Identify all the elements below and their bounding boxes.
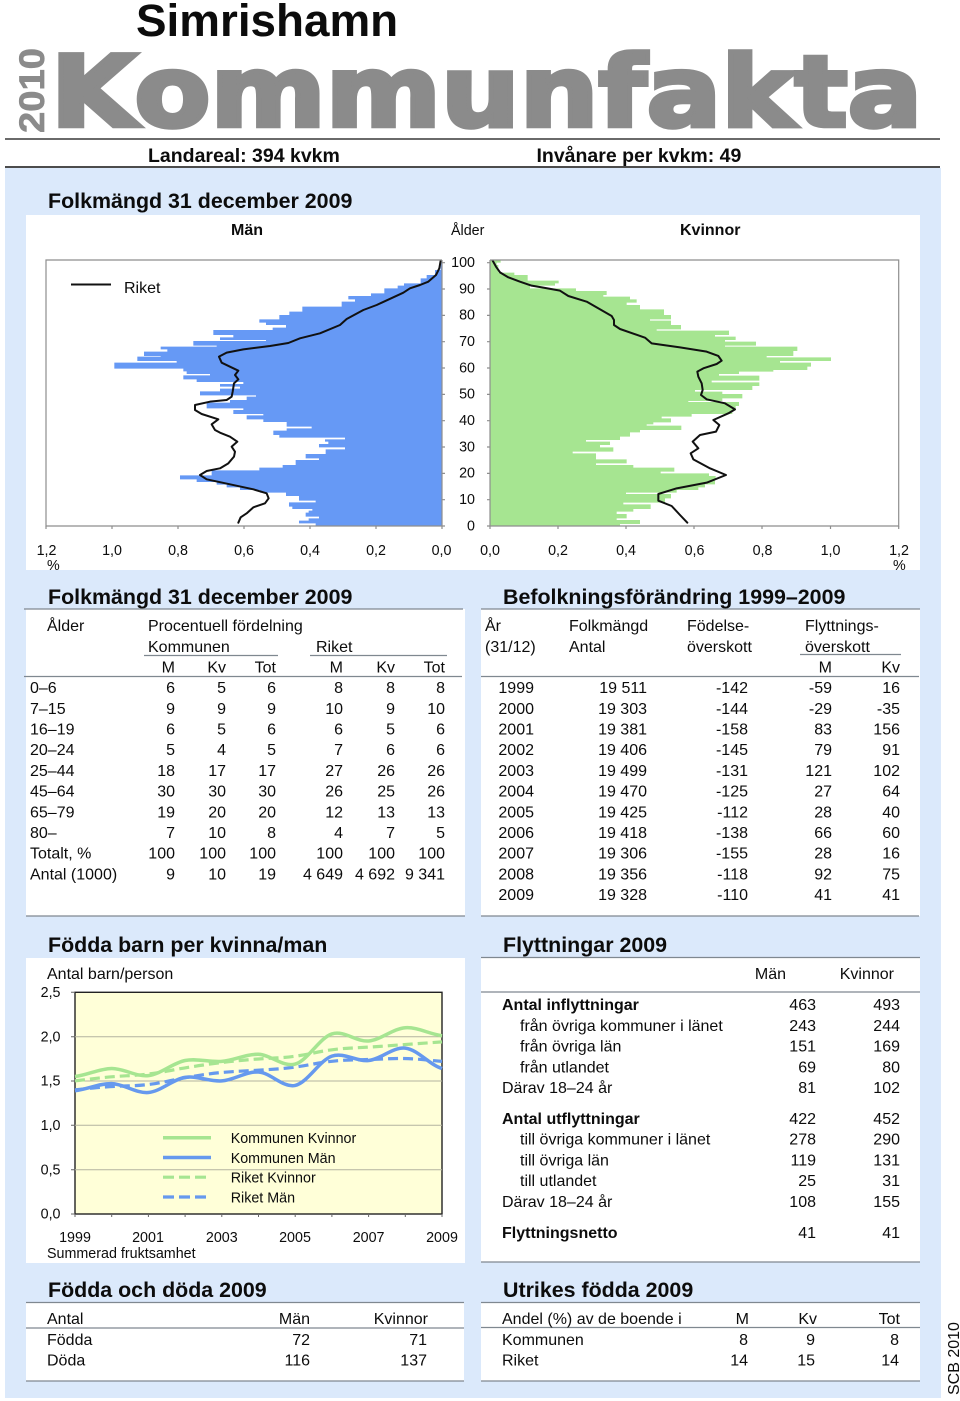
table rows: 6 bbox=[267, 680, 276, 697]
x axis labels: 2001 bbox=[132, 1230, 164, 1246]
table rows: -155 bbox=[716, 846, 748, 863]
table rows: -145 bbox=[716, 742, 748, 759]
table rows: 5 bbox=[217, 722, 226, 738]
inflow rows: 463 bbox=[789, 997, 816, 1014]
label: men: Män bbox=[231, 222, 263, 239]
table rows: 19 bbox=[157, 804, 175, 821]
table rows: 64 bbox=[882, 784, 900, 801]
panel: fertility chart bbox=[26, 958, 465, 1263]
y axis labels: 1,0 bbox=[41, 1118, 61, 1134]
table rows: 10 bbox=[208, 866, 226, 883]
axis labels: percent: 0,4 bbox=[616, 543, 636, 559]
x axis labels: 2003 bbox=[206, 1230, 238, 1246]
table rows: 2004 bbox=[498, 784, 534, 801]
table rows: 6 bbox=[386, 742, 395, 759]
panel: population table bbox=[24, 609, 465, 916]
table rows: 121 bbox=[805, 763, 832, 780]
table rows: 6 bbox=[166, 722, 175, 738]
panel: births and deaths table: 72 bbox=[292, 1332, 310, 1349]
table rows: 2008 bbox=[498, 866, 534, 883]
table rows: 16 bbox=[882, 846, 900, 863]
table rows: 8 bbox=[386, 680, 395, 697]
panel: births and deaths table: Födda bbox=[47, 1332, 92, 1349]
table rows: 9 bbox=[217, 701, 226, 718]
line: national men bbox=[75, 1058, 442, 1090]
key figure: land area: Landareal: 394 kvkm bbox=[148, 145, 340, 167]
table rows: 0–6 bbox=[30, 680, 57, 697]
table rows: 17 bbox=[258, 763, 276, 780]
table rows: 60 bbox=[882, 825, 900, 842]
table rows: 9 341 bbox=[405, 866, 445, 883]
axis labels: percent: 0,2 bbox=[548, 543, 568, 559]
line: national men bbox=[195, 261, 441, 523]
table rows: 10 bbox=[208, 825, 226, 842]
table rows: 9 bbox=[166, 701, 175, 718]
table rows: 7 bbox=[386, 825, 395, 842]
table rows: 19 328 bbox=[598, 887, 647, 904]
panel: foreign born table: 9 bbox=[806, 1332, 815, 1349]
axis labels: percent: 0,2 bbox=[366, 543, 386, 559]
table rows: 19 499 bbox=[598, 763, 647, 780]
table rows: 26 bbox=[325, 784, 343, 801]
panel: births and deaths table: 71 bbox=[409, 1332, 427, 1349]
panel: foreign born table: M bbox=[736, 1311, 749, 1328]
table rows: 17 bbox=[208, 763, 226, 780]
panel: population change table bbox=[481, 609, 920, 916]
table rows: 19 406 bbox=[598, 742, 647, 759]
table rows: 41 bbox=[814, 887, 832, 904]
table rows: 91 bbox=[882, 742, 900, 759]
panel: foreign born table: 15 bbox=[797, 1353, 815, 1370]
inflow rows: 493 bbox=[873, 997, 900, 1014]
table rows: 2006 bbox=[498, 825, 534, 842]
line: national women bbox=[75, 1042, 442, 1081]
line: municipality women bbox=[75, 1028, 442, 1076]
table rows: 19 470 bbox=[598, 784, 647, 801]
outflow rows: 278 bbox=[789, 1132, 816, 1149]
axis labels: percent: 1,2 bbox=[889, 543, 909, 559]
table rows: 66 bbox=[814, 825, 832, 842]
axis labels: age: 20 bbox=[459, 466, 475, 482]
outflow rows: till övriga kommuner i länet bbox=[520, 1132, 711, 1149]
inflow rows: 102 bbox=[873, 1080, 900, 1097]
table header: Födelse- bbox=[687, 618, 749, 635]
outflow rows: Antal utflyttningar bbox=[502, 1111, 640, 1128]
inflow rows: 151 bbox=[789, 1039, 816, 1056]
heading: population pyramid: Folkmängd 31 december 2009 bbox=[48, 189, 352, 213]
axis labels: percent: 1,2 bbox=[37, 543, 56, 559]
table rows: 5 bbox=[386, 722, 395, 738]
legend: national line bbox=[71, 280, 161, 297]
table rows: 20 bbox=[208, 804, 226, 821]
table rows: 16–19 bbox=[30, 722, 75, 738]
inflow rows: från övriga kommuner i länet bbox=[520, 1017, 723, 1035]
table header: (31/12) bbox=[485, 639, 536, 656]
panel: foreign born table: Tot bbox=[879, 1311, 901, 1328]
inflow rows bbox=[502, 997, 900, 1097]
legend: Riket Kvinnor bbox=[231, 1171, 316, 1187]
axis labels: age: 40 bbox=[459, 413, 475, 429]
table rows: 2003 bbox=[498, 763, 534, 780]
panel: population pyramid bbox=[26, 215, 920, 574]
axis labels: percent: % bbox=[893, 558, 906, 574]
axis labels: percent: 1,0 bbox=[102, 543, 122, 559]
outflow rows: 119 bbox=[790, 1152, 816, 1169]
table rows: 100 bbox=[418, 846, 445, 863]
table rows: 18 bbox=[157, 763, 175, 780]
panel: births and deaths table: 116 bbox=[284, 1353, 310, 1370]
panel: births and deaths table: Antal bbox=[47, 1311, 83, 1328]
panel: births and deaths table: Kvinnor bbox=[374, 1311, 429, 1328]
table header: Antal bbox=[569, 639, 605, 656]
axis labels: age: 50 bbox=[459, 387, 475, 403]
table rows: 100 bbox=[368, 846, 395, 863]
table header: Procentuell fördelning bbox=[148, 618, 303, 635]
table rows: 30 bbox=[258, 784, 276, 801]
table rows: 100 bbox=[148, 846, 175, 863]
legend bbox=[163, 1131, 356, 1206]
table rows: -35 bbox=[877, 701, 900, 718]
table header bbox=[47, 616, 446, 676]
axis labels: age: 10 bbox=[459, 492, 475, 508]
panel: foreign born table: Riket bbox=[502, 1353, 539, 1370]
table header: Kommunen bbox=[148, 639, 230, 656]
inflow rows: 81 bbox=[798, 1080, 816, 1097]
table rows: 25–44 bbox=[30, 763, 75, 780]
table rows bbox=[30, 680, 445, 883]
table rows: -125 bbox=[716, 784, 748, 801]
table rows: 5 bbox=[267, 742, 276, 759]
table rows: 20–24 bbox=[30, 742, 75, 759]
x axis labels: 2005 bbox=[279, 1230, 311, 1246]
table header: Män bbox=[755, 966, 786, 983]
table rows: 27 bbox=[325, 763, 343, 780]
axis labels: percent: 0,8 bbox=[168, 543, 188, 559]
table rows bbox=[498, 680, 900, 904]
table rows: -138 bbox=[716, 825, 748, 842]
inflow rows: 244 bbox=[873, 1018, 900, 1035]
axis labels: age: 70 bbox=[459, 334, 475, 350]
x axis labels bbox=[59, 1230, 458, 1246]
legend: Kommunen Män bbox=[231, 1151, 336, 1167]
table header: M bbox=[162, 659, 175, 676]
table rows: 6 bbox=[267, 722, 276, 738]
table rows: 6 bbox=[436, 722, 445, 738]
table header: M bbox=[330, 659, 343, 676]
table rows: Totalt, % bbox=[30, 846, 91, 863]
heading: births and deaths: Födda och döda 2009 bbox=[48, 1278, 267, 1302]
table rows: 12 bbox=[325, 804, 343, 821]
heading: population change: Befolkningsförändring 1999–2009 bbox=[503, 585, 845, 609]
y axis labels: 1,5 bbox=[41, 1074, 61, 1090]
table rows: 30 bbox=[208, 784, 226, 801]
panel: foreign born table bbox=[481, 1302, 920, 1381]
table header: Ålder bbox=[47, 616, 85, 635]
table rows: 25 bbox=[377, 784, 395, 801]
x axis labels: 2009 bbox=[426, 1230, 458, 1246]
axis labels: age: 60 bbox=[459, 360, 475, 376]
inflow rows: 169 bbox=[873, 1039, 900, 1056]
heading: fertility: Födda barn per kvinna/man bbox=[48, 933, 327, 957]
panel: migration table bbox=[481, 957, 920, 1262]
table rows: 26 bbox=[427, 763, 445, 780]
table rows: 4 692 bbox=[355, 866, 395, 883]
legend: national line: Riket bbox=[124, 280, 161, 297]
label: age: Ålder bbox=[451, 222, 485, 239]
table rows: 7 bbox=[166, 825, 175, 842]
table rows: 16 bbox=[882, 680, 900, 697]
panel: foreign born table: Kv bbox=[798, 1311, 817, 1328]
table header: Riket bbox=[316, 639, 353, 656]
outflow rows: till övriga län bbox=[520, 1152, 609, 1169]
table rows: 8 bbox=[436, 680, 445, 697]
table rows: 26 bbox=[377, 763, 395, 780]
table rows: 7–15 bbox=[30, 701, 66, 718]
table rows: -118 bbox=[717, 866, 748, 883]
table rows: 6 bbox=[334, 722, 343, 738]
x axis labels: 2007 bbox=[353, 1230, 385, 1246]
table rows: 79 bbox=[814, 742, 832, 759]
inflow rows: från övriga län bbox=[520, 1038, 621, 1056]
table header: Tot bbox=[424, 659, 446, 676]
table rows: 65–79 bbox=[30, 804, 75, 821]
net migration row: 41 bbox=[798, 1225, 816, 1242]
axis labels: percent: 0,8 bbox=[753, 543, 772, 559]
chart frame and axes bbox=[46, 260, 899, 529]
table rows: 26 bbox=[427, 784, 445, 801]
table rows: -29 bbox=[809, 701, 832, 718]
table header: M bbox=[819, 659, 832, 676]
table rows: -131 bbox=[716, 763, 748, 780]
outflow rows: 25 bbox=[798, 1173, 816, 1190]
plot area bbox=[75, 992, 442, 1214]
axis labels: percent: 0,6 bbox=[685, 543, 704, 559]
inflow rows: 69 bbox=[798, 1059, 816, 1076]
inflow rows: från utlandet bbox=[520, 1058, 610, 1076]
caption: Summerad fruktsamhet bbox=[47, 1246, 196, 1262]
axis labels: percent: 0,0 bbox=[432, 543, 451, 559]
line: national women bbox=[493, 261, 735, 523]
heading: population table: Folkmängd 31 december 2009 bbox=[48, 585, 352, 609]
table rows: 8 bbox=[334, 680, 343, 697]
table rows: 80– bbox=[30, 825, 57, 842]
inflow rows: Därav 18–24 år bbox=[502, 1079, 613, 1097]
heading: foreign born: Utrikes födda 2009 bbox=[503, 1278, 693, 1302]
table rows: 19 306 bbox=[598, 846, 647, 863]
table rows: 28 bbox=[814, 804, 832, 821]
outflow rows: 422 bbox=[789, 1111, 816, 1128]
table rows: 45–64 bbox=[30, 784, 75, 801]
key figure: inhabitants per sq km: Invånare per kvkm: 49 bbox=[536, 144, 742, 167]
axis labels: percent bbox=[37, 543, 909, 574]
panel: foreign born table: 8 bbox=[739, 1332, 748, 1349]
axis labels: age: 0 bbox=[467, 518, 475, 534]
axis labels: age bbox=[451, 255, 475, 534]
table rows: 156 bbox=[873, 722, 900, 738]
y axis labels: 2,5 bbox=[41, 985, 61, 1001]
table rows: 2009 bbox=[498, 887, 534, 904]
table rows: 6 bbox=[436, 742, 445, 759]
table rows: 20 bbox=[258, 804, 276, 821]
table rows: 19 303 bbox=[598, 701, 647, 718]
legend: Kommunen Kvinnor bbox=[231, 1131, 356, 1147]
panel: births and deaths table: 137 bbox=[400, 1353, 427, 1370]
table rows: -144 bbox=[716, 701, 748, 718]
table rows: 9 bbox=[267, 701, 276, 718]
table rows: 2001 bbox=[498, 722, 534, 738]
table rows: 5 bbox=[217, 680, 226, 697]
axis labels: percent: 1,0 bbox=[821, 543, 840, 559]
table rows: 19 bbox=[258, 866, 276, 883]
table header: överskott bbox=[805, 639, 870, 656]
table rows: 75 bbox=[882, 866, 900, 883]
panel: foreign born table: 8 bbox=[890, 1332, 899, 1349]
table rows: 1999 bbox=[498, 680, 534, 697]
table rows: 19 381 bbox=[598, 722, 647, 738]
table rows: 19 418 bbox=[598, 825, 647, 842]
table rows: 4 649 bbox=[303, 866, 343, 883]
table rows: 100 bbox=[249, 846, 276, 863]
heading: migration: Flyttningar 2009 bbox=[503, 933, 667, 957]
chart: men bars bbox=[114, 260, 442, 526]
table rows: -142 bbox=[716, 680, 748, 697]
inflow rows: 80 bbox=[882, 1059, 900, 1076]
table header: År bbox=[485, 616, 502, 635]
table rows: 13 bbox=[377, 804, 395, 821]
table rows: 13 bbox=[427, 804, 445, 821]
panel: foreign born table: 14 bbox=[730, 1353, 748, 1370]
table header bbox=[485, 616, 900, 676]
table rows: 6 bbox=[166, 680, 175, 697]
table rows: -158 bbox=[716, 722, 748, 738]
table rows: 8 bbox=[267, 825, 276, 842]
table rows: 40 bbox=[882, 804, 900, 821]
panel: foreign born table: 14 bbox=[881, 1353, 899, 1370]
net migration row: 41 bbox=[882, 1225, 900, 1242]
x axis labels: 1999 bbox=[59, 1230, 91, 1246]
table rows: 83 bbox=[814, 722, 832, 738]
chart: women bars bbox=[490, 260, 831, 526]
label: women: Kvinnor bbox=[680, 222, 740, 239]
table header bbox=[755, 966, 895, 983]
table header: Flyttnings- bbox=[805, 618, 879, 635]
y axis labels: 0,5 bbox=[41, 1162, 61, 1178]
table rows: 100 bbox=[199, 846, 226, 863]
table rows: 100 bbox=[316, 846, 343, 863]
table rows: 9 bbox=[386, 701, 395, 718]
axis labels: age: 90 bbox=[459, 281, 475, 297]
table rows: 2002 bbox=[498, 742, 534, 759]
table rows: -110 bbox=[717, 887, 748, 904]
table rows: 2007 bbox=[498, 846, 534, 863]
logo: Kommunfakta: Kommunfakta bbox=[51, 36, 922, 150]
table rows: 92 bbox=[814, 866, 832, 883]
table rows: 19 425 bbox=[598, 804, 647, 821]
outflow rows: till utlandet bbox=[520, 1173, 597, 1190]
outflow rows: 131 bbox=[873, 1152, 900, 1169]
outflow rows: 31 bbox=[882, 1173, 900, 1190]
axis labels: percent: % bbox=[47, 558, 60, 574]
line: municipality men bbox=[75, 1048, 442, 1093]
panel: births and deaths table: Män bbox=[279, 1311, 310, 1328]
table rows: 5 bbox=[166, 742, 175, 759]
axis labels: age: 30 bbox=[459, 439, 475, 455]
table rows: 10 bbox=[427, 701, 445, 718]
table rows: 7 bbox=[334, 742, 343, 759]
axis labels: age: 100 bbox=[451, 255, 475, 271]
table rows: -112 bbox=[717, 804, 748, 821]
y axis labels: 0,0 bbox=[41, 1207, 61, 1223]
inflow rows: Antal inflyttningar bbox=[502, 997, 639, 1014]
axis labels: percent: 0,4 bbox=[300, 543, 320, 559]
outflow rows: 290 bbox=[873, 1132, 900, 1149]
table header: överskott bbox=[687, 639, 752, 656]
table rows: 41 bbox=[882, 887, 900, 904]
table rows: Antal (1000) bbox=[30, 866, 117, 883]
table header: Kv bbox=[376, 659, 395, 676]
table header: Folkmängd bbox=[569, 618, 648, 635]
y axis labels: 2,0 bbox=[41, 1029, 61, 1045]
table rows: 5 bbox=[436, 825, 445, 842]
net migration row bbox=[502, 1225, 900, 1242]
panel: foreign born table: Kommunen bbox=[502, 1332, 584, 1349]
table rows: 102 bbox=[873, 763, 900, 780]
table rows: 28 bbox=[814, 846, 832, 863]
table header: Kv bbox=[207, 659, 226, 676]
inflow rows: 243 bbox=[789, 1018, 816, 1035]
axis title: Antal barn/person bbox=[47, 966, 173, 983]
table header: Kv bbox=[881, 659, 900, 676]
outflow rows: 452 bbox=[873, 1111, 900, 1128]
table rows: 19 511 bbox=[599, 680, 647, 697]
table rows: 27 bbox=[814, 784, 832, 801]
axis labels: age: 80 bbox=[459, 308, 475, 324]
table rows: 2005 bbox=[498, 804, 534, 821]
table rows: 19 356 bbox=[598, 866, 647, 883]
outflow rows: 108 bbox=[789, 1194, 816, 1211]
table header: Tot bbox=[255, 659, 277, 676]
panel: births and deaths table: Döda bbox=[47, 1353, 85, 1370]
table rows: 10 bbox=[325, 701, 343, 718]
table rows: 9 bbox=[166, 866, 175, 883]
table rows: 2000 bbox=[498, 701, 534, 718]
table rows: 30 bbox=[157, 784, 175, 801]
y axis labels bbox=[41, 985, 61, 1223]
table rows: -59 bbox=[809, 680, 832, 697]
table rows: 4 bbox=[334, 825, 343, 842]
axis labels: percent: 0,0 bbox=[480, 543, 500, 559]
legend: Riket Män bbox=[231, 1190, 295, 1206]
axis labels: percent: 0,6 bbox=[234, 543, 254, 559]
panel: foreign born table: Andel (%) av de boende i bbox=[502, 1311, 682, 1328]
logo: year 2010 vertical: 2010 bbox=[13, 48, 52, 133]
table header: Kvinnor bbox=[840, 966, 895, 983]
outflow rows: 155 bbox=[873, 1194, 900, 1211]
net migration row: Flyttningsnetto bbox=[502, 1225, 618, 1242]
outflow rows bbox=[502, 1111, 900, 1211]
table rows: 4 bbox=[217, 742, 226, 759]
panel: births and deaths table bbox=[26, 1302, 464, 1381]
outflow rows: Därav 18–24 år bbox=[502, 1193, 613, 1211]
